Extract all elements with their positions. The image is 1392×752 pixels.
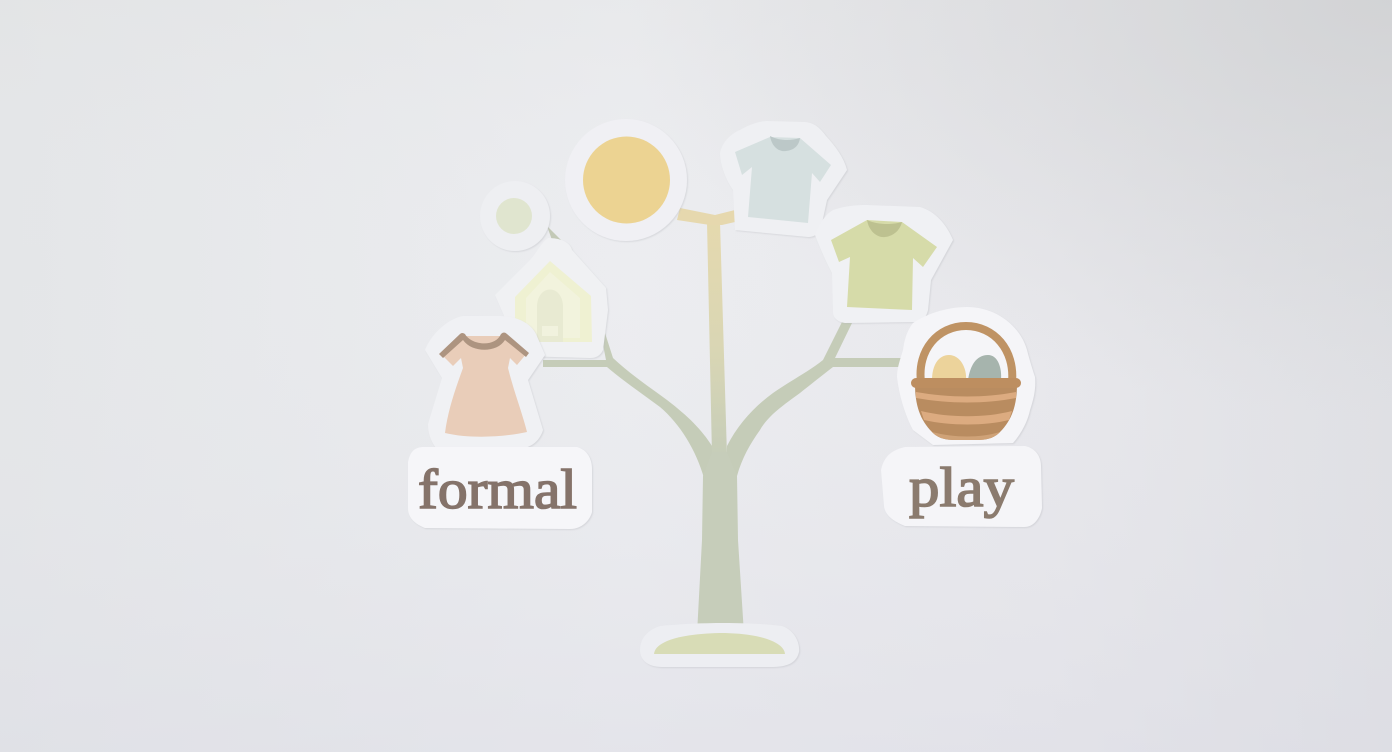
house icon <box>515 261 592 342</box>
top fork <box>677 208 735 225</box>
ground sticker <box>640 623 799 667</box>
basket rim <box>911 378 1021 388</box>
small green circle <box>496 198 532 234</box>
dress <box>439 332 529 437</box>
sticker: house <box>495 238 608 358</box>
egg yellow <box>932 355 966 380</box>
blue shirt collar <box>770 136 800 151</box>
green shirt <box>831 220 937 310</box>
label: formal <box>408 447 592 529</box>
egg blue <box>968 355 1001 380</box>
basket stripes <box>916 392 1016 424</box>
blue shirt <box>735 136 831 223</box>
sticker: sun <box>565 119 687 241</box>
sticker: small circle <box>480 181 550 251</box>
label: play <box>881 446 1042 527</box>
ground <box>654 633 785 654</box>
text: formal: formal <box>418 459 577 521</box>
dress collar <box>439 332 529 358</box>
sticker: blue shirt <box>720 121 847 237</box>
sticker: dress <box>425 316 545 448</box>
sticker: green shirt <box>815 205 953 323</box>
basket <box>911 326 1021 440</box>
branch: right <box>726 322 902 476</box>
basket bowl <box>915 384 1017 440</box>
sticker: basket <box>897 307 1035 445</box>
central pole <box>707 222 727 456</box>
branch: upper left twig <box>547 226 561 240</box>
text: play: play <box>909 457 1014 519</box>
basket handle <box>921 326 1012 382</box>
yellow circle <box>583 136 670 224</box>
branch: left <box>543 333 712 480</box>
green shirt collar <box>867 220 902 237</box>
tree <box>543 208 902 667</box>
trunk <box>697 452 744 634</box>
